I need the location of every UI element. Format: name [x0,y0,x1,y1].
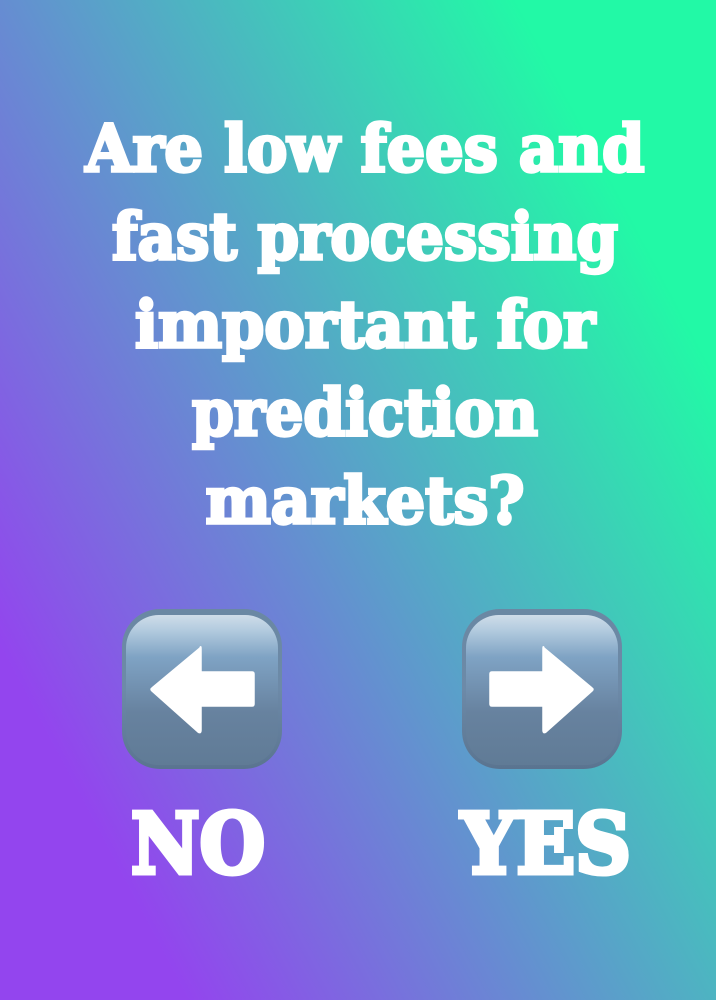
icon: right arrow key [462,609,622,769]
title: important for [135,287,596,363]
label: YES: YES [460,795,631,893]
title: Are low fees and [85,111,644,187]
label: NO: NO [131,795,265,893]
title: prediction [192,375,538,451]
title: fast processing [112,199,618,275]
title [85,111,644,539]
title: markets? [206,463,524,539]
icon: left arrow key [122,609,282,769]
